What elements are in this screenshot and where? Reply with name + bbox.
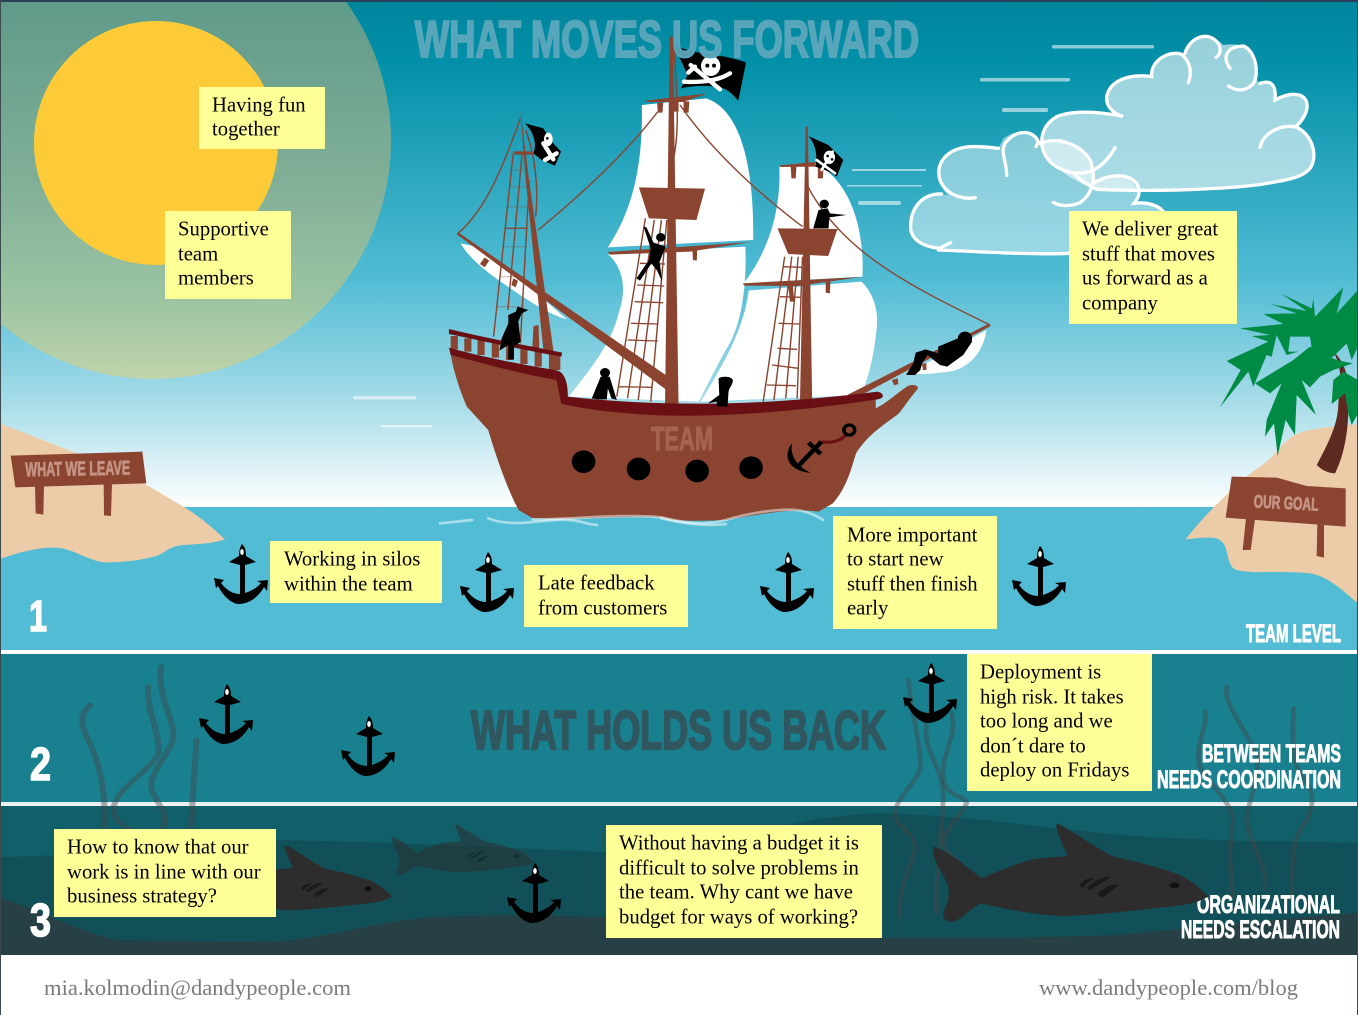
- note: having fun: [199, 87, 325, 149]
- anchor 4: [1012, 546, 1066, 606]
- sails: [461, 98, 986, 402]
- hull: [451, 355, 918, 521]
- small cloud: [910, 132, 1163, 254]
- note: working in silos: [270, 541, 442, 603]
- portholes: [572, 450, 763, 482]
- mizzen flag: [525, 123, 561, 166]
- palm leaves: [1220, 287, 1358, 456]
- note: deployment: too long and we: [980, 711, 1113, 733]
- sign: what we leave: [11, 452, 146, 516]
- footer email: mia.kolmodin@dandypeople.com: [44, 975, 351, 1000]
- team label: TEAM: [651, 420, 713, 457]
- note: budget: Without having a budget it is: [619, 833, 859, 855]
- note: deployment: Deployment is: [980, 662, 1101, 684]
- note: supportive team: members: [178, 268, 254, 290]
- note: business strategy: business strategy?: [67, 886, 217, 908]
- note: business strategy: [54, 829, 276, 917]
- note: having fun: Having fun: [212, 95, 306, 117]
- right island with palm: [1186, 287, 1358, 603]
- sailors: [592, 200, 972, 407]
- band dividers: [0, 650, 1358, 654]
- heading: what holds us back: WHAT HOLDS US BACK: [471, 699, 886, 761]
- note: having fun: together: [212, 119, 280, 141]
- note: supportive team: Supportive: [178, 219, 269, 241]
- poop deck railing: [449, 329, 562, 370]
- title: what moves us forward: WHAT MOVES US FORWARD: [415, 11, 919, 69]
- main flag: [673, 46, 746, 101]
- sign: our goal: [1226, 477, 1346, 558]
- anchor 7: [903, 663, 957, 723]
- shark: left: [198, 845, 392, 914]
- sign: our goal: OUR GOAL: [1253, 491, 1319, 515]
- level number 2: 2: [30, 738, 51, 790]
- note: budget: difficult to solve problems in: [619, 858, 859, 880]
- level 3 label: [1181, 891, 1340, 944]
- note: late feedback: Late feedback: [538, 573, 655, 595]
- seaweed right: [895, 680, 1312, 917]
- sun halo: [0, 0, 391, 379]
- background sky: [0, 0, 1358, 507]
- note: supportive team: team: [178, 244, 218, 266]
- note: more important: stuff then finish: [847, 574, 978, 596]
- big cloud: [1041, 36, 1314, 191]
- pirate ship: [440, 37, 991, 525]
- note: working in silos: Working in silos: [284, 549, 420, 571]
- band 2: between teams: [0, 654, 1358, 802]
- anchor 1: [214, 544, 268, 604]
- note: more important: More important: [847, 525, 978, 547]
- band 3: organizational: [0, 806, 1358, 955]
- note: deployment: [967, 654, 1152, 791]
- label: between teams: [1157, 740, 1341, 794]
- water waves: [440, 510, 823, 525]
- note: budget: the team. Why cant we have: [619, 882, 853, 904]
- hull anchor: [788, 425, 855, 473]
- sea band 1: team level: [0, 507, 1358, 650]
- hull trim: [449, 348, 883, 416]
- note: deployment: don´t dare to: [980, 736, 1086, 758]
- note: business strategy: How to know that our: [67, 837, 249, 859]
- note: late feedback: from customers: [538, 598, 667, 620]
- shark: distant: [391, 824, 534, 875]
- left island: [0, 423, 225, 562]
- anchor 6: [341, 716, 395, 776]
- note: late feedback: [524, 565, 688, 627]
- note: we deliver: stuff that moves: [1082, 244, 1215, 266]
- seaweed left: [82, 667, 196, 830]
- note: deployment: high risk. It takes: [980, 687, 1124, 709]
- rigging: [457, 50, 990, 402]
- note: working in silos: within the team: [284, 574, 413, 596]
- note: we deliver: company: [1082, 293, 1158, 315]
- anchor 2: [460, 552, 514, 612]
- note: business strategy: work is in line with our: [67, 862, 261, 884]
- sun: [34, 21, 278, 265]
- footer website: www.dandypeople.com/blog: [1039, 975, 1298, 1000]
- note: supportive team: [165, 211, 291, 299]
- note: we deliver: We deliver great: [1082, 219, 1218, 241]
- note: deployment: deploy on Fridays: [980, 760, 1129, 782]
- anchor 3: [760, 552, 814, 612]
- note: budget: [606, 825, 882, 938]
- fore flag: [808, 136, 843, 177]
- level number 1: 1: [29, 592, 47, 641]
- anchor 8: [507, 863, 561, 923]
- note: more important: [833, 516, 997, 629]
- captain: [499, 307, 528, 359]
- palm trunk: [1317, 352, 1349, 473]
- note: more important: early: [847, 598, 889, 620]
- anchor 5: [199, 684, 253, 744]
- note: budget: budget for ways of working?: [619, 907, 858, 929]
- sign: what we leave: WHAT WE LEAVE: [25, 458, 130, 481]
- note: we deliver: us forward as a: [1082, 268, 1208, 290]
- masts and yards: [456, 37, 991, 407]
- sky wind lines: [353, 45, 1154, 428]
- shark: large: [933, 823, 1208, 922]
- note: we deliver: [1069, 211, 1237, 324]
- note: more important: to start new: [847, 549, 944, 571]
- level number 3: 3: [30, 894, 51, 946]
